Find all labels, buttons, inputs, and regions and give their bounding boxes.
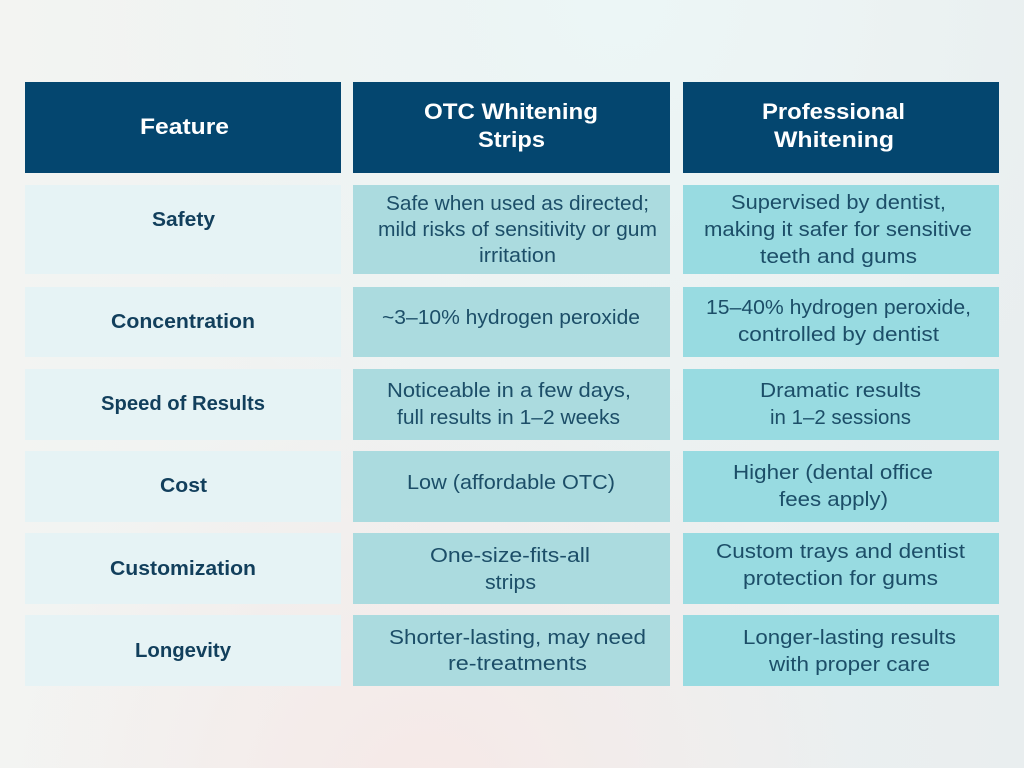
- OTC cell: Safety: irritation: [479, 245, 556, 267]
- professional cell: Safety: making it safer for sensitive: [704, 219, 972, 241]
- header: OTC Whitening Strips: Strips: [478, 127, 545, 152]
- feature cell: Safety: Safety: [152, 209, 216, 231]
- OTC cell: Longevity: [353, 615, 670, 686]
- OTC cell: Customization: One-size-fits-all: [430, 545, 590, 567]
- header: OTC Whitening Strips: [353, 82, 670, 173]
- header: Professional Whitening: [683, 82, 999, 173]
- OTC cell: Longevity: Shorter-lasting, may need: [389, 627, 646, 649]
- feature cell: Longevity: Longevity: [135, 640, 232, 662]
- row: Safety: [25, 185, 999, 274]
- feature cell: Speed of Results: [25, 369, 341, 440]
- OTC cell: Speed of Results: full results in 1–2 weeks: [397, 407, 620, 429]
- professional cell: Longevity: [683, 615, 999, 686]
- feature cell: Speed of Results: Speed of Results: [101, 393, 265, 415]
- feature cell: Customization: Customization: [110, 558, 256, 580]
- professional cell: Customization: [683, 533, 999, 604]
- table header row: [25, 82, 999, 173]
- feature cell: Cost: Cost: [160, 475, 207, 497]
- professional cell: Concentration: 15–40% hydrogen peroxide,: [706, 297, 971, 319]
- professional cell: Customization: Custom trays and dentist: [716, 541, 965, 563]
- row: Concentration: [25, 287, 999, 357]
- row: Speed of Results: [25, 369, 999, 440]
- OTC cell: Safety: Safe when used as directed;: [386, 193, 649, 215]
- OTC cell: Speed of Results: Noticeable in a few days,: [387, 380, 631, 402]
- professional cell: Longevity: Longer-lasting results: [743, 627, 956, 649]
- OTC cell: Safety: [353, 185, 670, 274]
- feature cell: Concentration: Concentration: [111, 311, 255, 333]
- feature cell: Customization: [25, 533, 341, 604]
- feature cell: Safety: [25, 185, 341, 274]
- OTC cell: Customization: strips: [485, 572, 536, 594]
- header: Feature: Feature: [140, 114, 229, 139]
- professional cell: Speed of Results: Dramatic results: [760, 380, 921, 402]
- OTC cell: Cost: [353, 451, 670, 522]
- professional cell: Cost: [683, 451, 999, 522]
- OTC cell: Customization: [353, 533, 670, 604]
- row: Longevity: [25, 615, 999, 686]
- OTC cell: Safety: mild risks of sensitivity or gum: [378, 219, 657, 241]
- header: Professional Whitening: Whitening: [774, 127, 894, 152]
- header: Professional Whitening: Professional: [762, 99, 905, 124]
- feature cell: Cost: [25, 451, 341, 522]
- header: Feature: [25, 82, 341, 173]
- professional cell: Longevity: with proper care: [768, 654, 930, 676]
- professional cell: Cost: fees apply): [779, 489, 888, 511]
- professional cell: Cost: Higher (dental office: [733, 462, 933, 484]
- feature cell: Longevity: [25, 615, 341, 686]
- OTC cell: Speed of Results: [353, 369, 670, 440]
- OTC cell: Longevity: re-treatments: [448, 653, 587, 675]
- feature cell: Concentration: [25, 287, 341, 357]
- professional cell: Speed of Results: in 1–2 sessions: [770, 407, 911, 429]
- professional cell: Concentration: [683, 287, 999, 357]
- professional cell: Customization: protection for gums: [743, 568, 938, 590]
- professional cell: Safety: Supervised by dentist,: [731, 192, 946, 214]
- header: OTC Whitening Strips: OTC Whitening: [424, 99, 598, 124]
- professional cell: Safety: [683, 185, 999, 274]
- row: Cost: [25, 451, 999, 522]
- OTC cell: Concentration: [353, 287, 670, 357]
- OTC cell: Cost: Low (affordable OTC): [407, 472, 615, 494]
- professional cell: Concentration: controlled by dentist: [738, 324, 939, 346]
- row: Customization: [25, 533, 999, 604]
- professional cell: Safety: teeth and gums: [760, 246, 917, 268]
- professional cell: Speed of Results: [683, 369, 999, 440]
- OTC cell: Concentration: ~3–10% hydrogen peroxide: [382, 307, 640, 329]
